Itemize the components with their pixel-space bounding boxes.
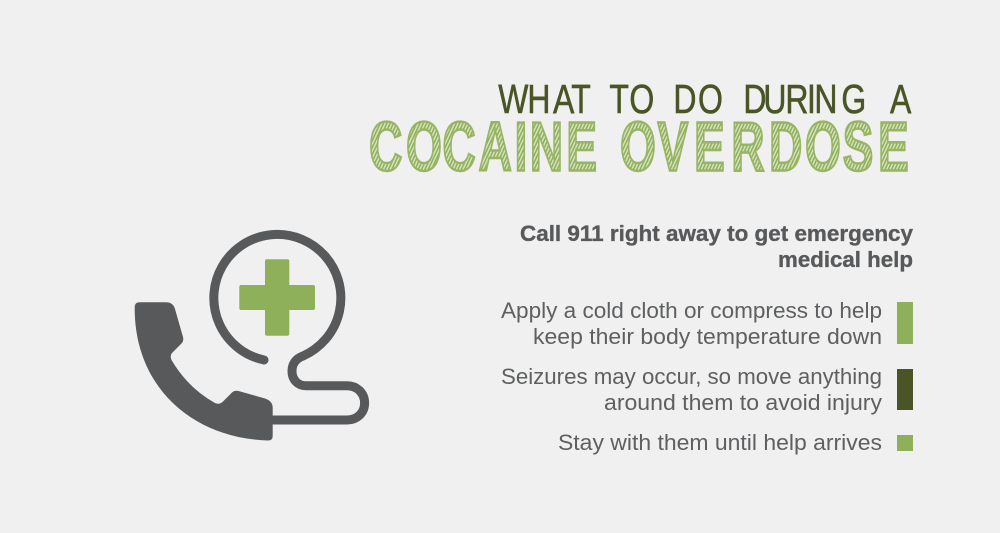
tip: seizures: Seizures may occur, so move anything (501, 364, 882, 389)
callout: call 911: medical help (778, 247, 913, 272)
tip: stay with them: Stay with them until help arrives (558, 430, 882, 455)
title line 2: hatched: COCAINE OVERDOSE (369, 107, 909, 186)
tip: cold compress: Apply a cold cloth or compress to help (501, 298, 882, 323)
icon: telephone with medical cross (135, 234, 365, 440)
tip: cold compress: keep their body temperature down (533, 324, 882, 349)
tip: cold compress (501, 298, 882, 349)
title line 1: WHAT TO DO DURING A (498, 76, 912, 122)
tip: seizures: around them to avoid injury (604, 390, 883, 415)
tip marker: light green square (897, 435, 913, 451)
tip marker: dark green bar (897, 369, 913, 410)
callout: call 911 (520, 221, 914, 272)
handset (135, 302, 273, 440)
cord and circle (214, 234, 365, 420)
medical cross (239, 259, 315, 336)
tip: seizures (501, 364, 883, 415)
callout: call 911: Call 911 right away to get emergency (520, 221, 914, 246)
tip marker: light green bar (897, 302, 913, 344)
title (369, 76, 912, 186)
